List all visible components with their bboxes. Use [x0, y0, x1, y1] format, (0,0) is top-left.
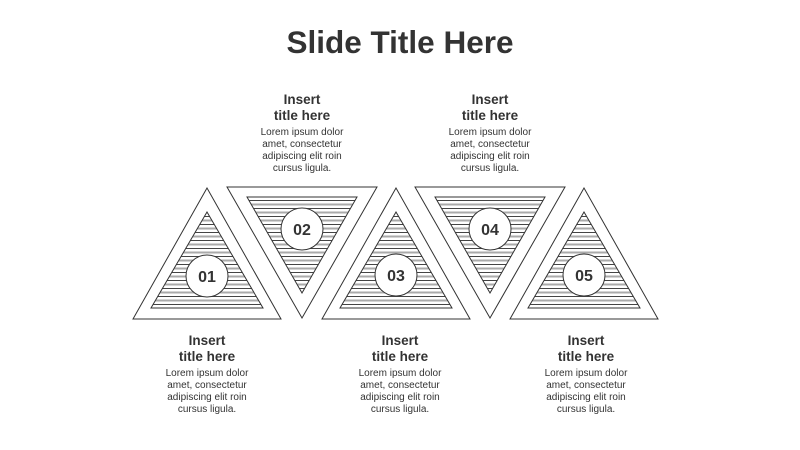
- text block 03: title here: [372, 349, 429, 364]
- text block 03: adipiscing elit roin: [360, 392, 440, 403]
- text block 05: Insert: [568, 333, 605, 348]
- text block 04: amet, consectetur: [450, 139, 530, 150]
- text block 03: Lorem ipsum dolor: [359, 368, 442, 379]
- text block 04: cursus ligula.: [461, 163, 519, 174]
- text block 02: amet, consectetur: [262, 139, 342, 150]
- triangle 04: [415, 187, 565, 318]
- text block 01: cursus ligula.: [178, 404, 236, 415]
- text block 03: cursus ligula.: [371, 404, 429, 415]
- text block 01: [166, 333, 249, 415]
- triangle 03: [322, 188, 470, 319]
- text block 01: adipiscing elit roin: [167, 392, 247, 403]
- text block 04: title here: [462, 108, 519, 123]
- text block 01: title here: [179, 349, 236, 364]
- triangle 01: [133, 188, 281, 319]
- text block 05: adipiscing elit roin: [546, 392, 626, 403]
- text block 04: Lorem ipsum dolor: [449, 127, 532, 138]
- text block 02: Lorem ipsum dolor: [261, 127, 344, 138]
- triangle 05: [510, 188, 658, 319]
- text block 02: [261, 92, 344, 174]
- text block 01: Insert: [189, 333, 226, 348]
- text block 02: cursus ligula.: [273, 163, 331, 174]
- triangle 02: [227, 187, 377, 318]
- text block 05: amet, consectetur: [546, 380, 626, 391]
- text block 05: [545, 333, 628, 415]
- text block 04: [449, 92, 532, 174]
- text block 04: adipiscing elit roin: [450, 151, 530, 162]
- text block 02: title here: [274, 108, 331, 123]
- text block 03: amet, consectetur: [360, 380, 440, 391]
- text block 04: Insert: [472, 92, 509, 107]
- triangle 05: 05: [575, 268, 593, 285]
- text block 02: Insert: [284, 92, 321, 107]
- triangle 02: 02: [293, 222, 311, 239]
- triangle 01: 01: [198, 269, 216, 286]
- title: Slide Title Here: [286, 24, 514, 60]
- text block 03: Insert: [382, 333, 419, 348]
- triangle 04: 04: [481, 222, 499, 239]
- text block 05: cursus ligula.: [557, 404, 615, 415]
- text block 02: adipiscing elit roin: [262, 151, 342, 162]
- text block 01: amet, consectetur: [167, 380, 247, 391]
- text block 05: Lorem ipsum dolor: [545, 368, 628, 379]
- text block 01: Lorem ipsum dolor: [166, 368, 249, 379]
- text block 03: [359, 333, 442, 415]
- triangle 03: 03: [387, 268, 405, 285]
- text block 05: title here: [558, 349, 615, 364]
